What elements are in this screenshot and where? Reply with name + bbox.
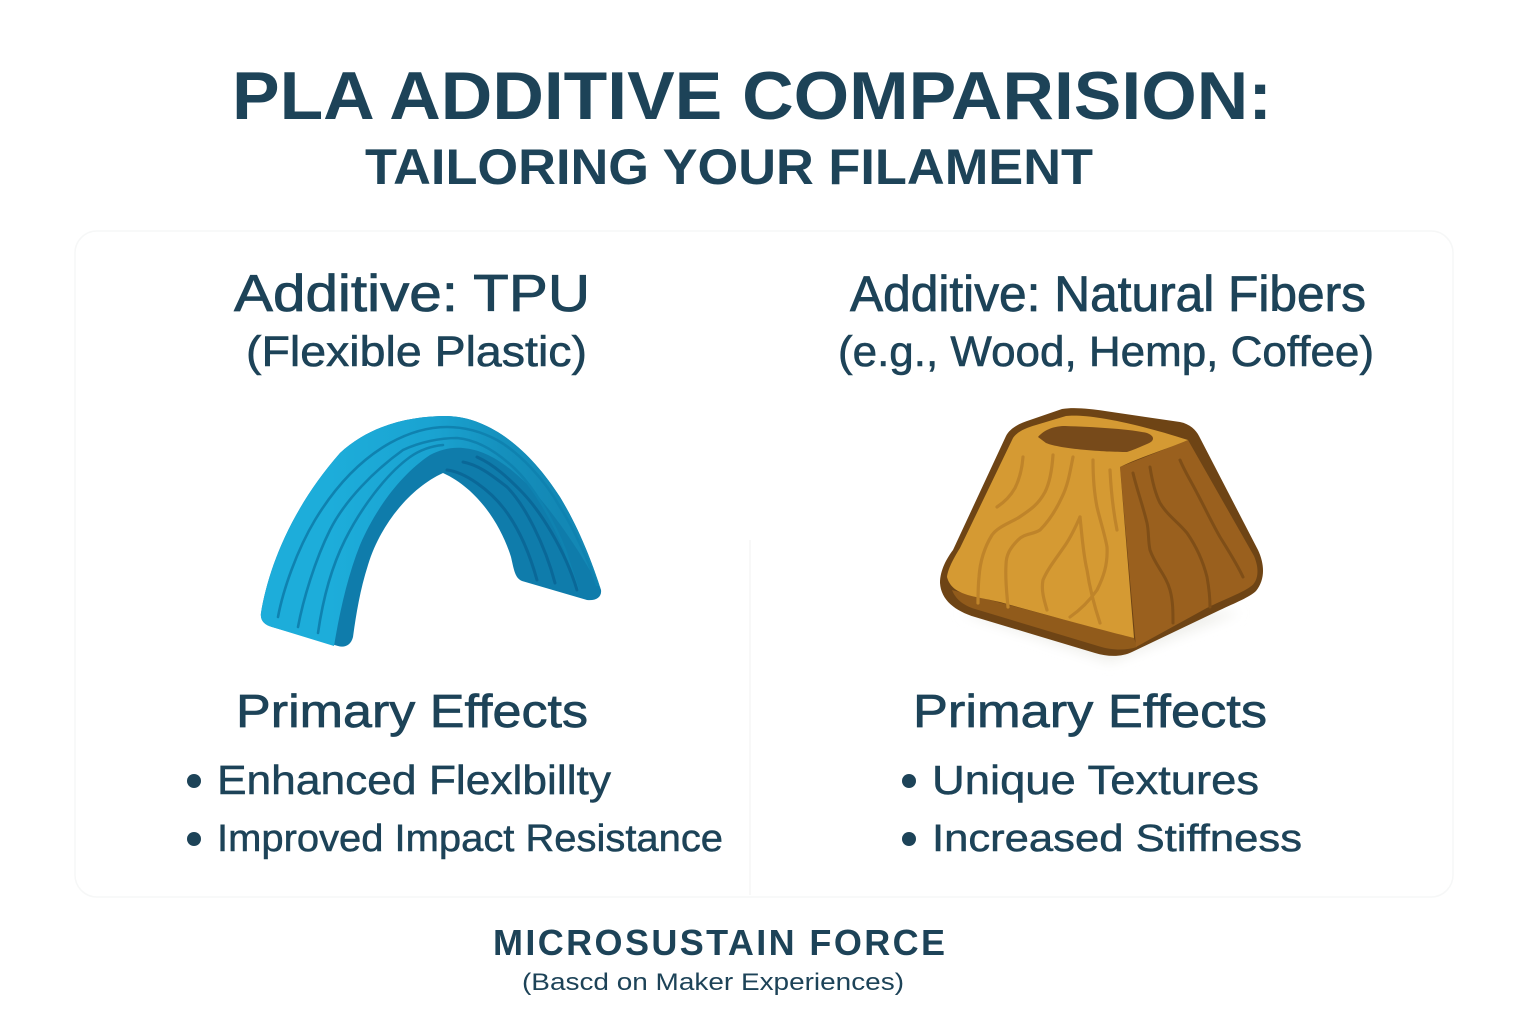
subheading: flexible plastic: (Flexible Plastic) xyxy=(246,328,587,376)
title: PLA ADDITIVE COMPARISION: xyxy=(232,58,1272,134)
panel: natural fibers xyxy=(838,266,1374,860)
light front face xyxy=(947,416,1188,638)
subtitle: TAILORING YOUR FILAMENT xyxy=(365,139,1093,195)
list: TPU effects: Enhanced Flexlbillty xyxy=(217,757,612,803)
heading: primary effects: Primary Effects xyxy=(913,685,1267,737)
heading: TPU additive: Additive: TPU xyxy=(234,265,590,323)
front grooves xyxy=(278,427,597,633)
subheading: examples: (e.g., Wood, Hemp, Coffee) xyxy=(838,328,1374,376)
footer note: (Bascd on Maker Experiences) xyxy=(522,969,904,996)
list: natural fiber effects: Unique Textures xyxy=(932,757,1259,803)
lower edge xyxy=(952,590,1137,650)
icon: flexible blue TPU arch xyxy=(261,416,601,647)
list: TPU effects xyxy=(187,757,723,860)
list: natural fiber effects xyxy=(902,757,1302,860)
front face xyxy=(261,416,601,646)
wood grain, side xyxy=(1133,460,1243,623)
comparison panel xyxy=(75,231,1453,897)
panel: TPU xyxy=(187,265,723,860)
footer brand: MICROSUSTAIN FORCE xyxy=(493,922,945,963)
list: natural fiber effects: Increased Stiffness xyxy=(932,818,1302,860)
opening xyxy=(1038,426,1153,452)
shaded right face xyxy=(1120,440,1257,647)
icon: wood fiber printed block xyxy=(940,408,1263,662)
heading: natural fibers additive: Additive: Natural Fibers xyxy=(850,266,1366,322)
list: TPU effects: Improved Impact Resistance xyxy=(217,818,723,860)
heading: primary effects: Primary Effects xyxy=(236,685,588,737)
wood grain, front xyxy=(978,455,1117,623)
back grooves xyxy=(447,457,577,590)
